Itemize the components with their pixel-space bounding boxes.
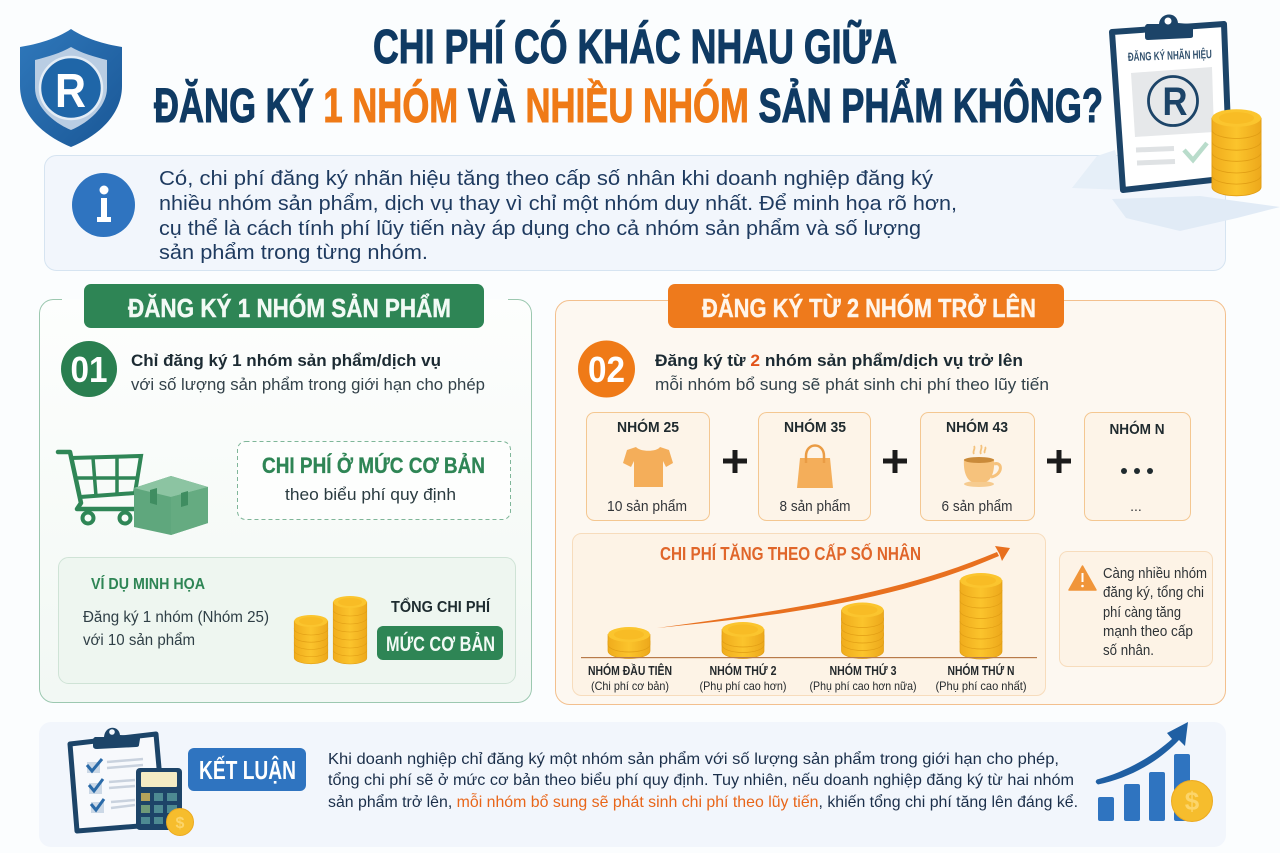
icon: warning triangle bbox=[1069, 566, 1096, 590]
conclusion text bbox=[328, 750, 1078, 811]
chart baseline bbox=[581, 657, 1037, 658]
intro text: Có, chi phí đăng ký nhãn hiệu tăng theo cấp số nhân khi doanh nghiệp đăng ký bbox=[159, 167, 934, 190]
step two description bbox=[655, 351, 1049, 394]
heading: one group: ĐĂNG KÝ 1 NHÓM SẢN PHẨM bbox=[128, 293, 451, 323]
title: ĐĂNG KÝ 1 NHÓM VÀ NHIỀU NHÓM SẢN PHẨM KHÔNG? bbox=[154, 78, 1103, 133]
total cost badge: MỨC CƠ BẢN bbox=[386, 632, 495, 656]
card: group 25 bbox=[586, 412, 710, 520]
icon: checklist clipboard with calculator and coin bbox=[70, 728, 194, 836]
intro text: nhiều nhóm sản phẩm, dịch vụ thay vì chỉ một nhóm duy nhất. Để minh họa rõ hơn, bbox=[159, 192, 957, 215]
coin stack 3 bbox=[842, 602, 884, 658]
conclusion text: sản phẩm trở lên, mỗi nhóm bổ sung sẽ phát sinh chi phí theo lũy tiến, khiến tổng chi phí tăng lên đáng kể. bbox=[328, 792, 1078, 811]
badge 02 bbox=[578, 340, 635, 398]
conclusion text: Khi doanh nghiệp chỉ đăng ký một nhóm sản phẩm với số lượng sản phẩm trong giới hạn cho phép, bbox=[328, 750, 1059, 768]
icon: rising bar chart with coin bbox=[1096, 722, 1212, 822]
chart labels: NHÓM ĐẦU TIÊN bbox=[588, 663, 672, 678]
card: group 35 bbox=[758, 412, 870, 520]
step two description: mỗi nhóm bổ sung sẽ phát sinh chi phí theo lũy tiến bbox=[655, 375, 1049, 394]
card: group 43: NHÓM 43 bbox=[946, 418, 1008, 436]
card: group 25: NHÓM 25 bbox=[617, 418, 679, 436]
card: group N bbox=[1084, 412, 1190, 520]
plus bbox=[1047, 450, 1071, 473]
card: group N: ... bbox=[1130, 498, 1142, 514]
icon: rising bar chart with coin: $ bbox=[1185, 786, 1200, 816]
icon: shopping cart and box bbox=[58, 452, 208, 535]
panel: register multiple groups bbox=[556, 284, 1226, 704]
heading: multiple groups: ĐĂNG KÝ TỪ 2 NHÓM TRỞ LÊN bbox=[702, 292, 1036, 323]
badge 02: 02 bbox=[588, 349, 625, 390]
panel: example: Đăng ký 1 nhóm (Nhóm 25) bbox=[83, 609, 269, 626]
chart labels bbox=[588, 663, 1026, 693]
chart labels: NHÓM THỨ N bbox=[948, 663, 1014, 678]
step one description bbox=[131, 351, 485, 394]
ellipsis bbox=[1121, 468, 1153, 474]
step two description: Đăng ký từ 2 nhóm sản phẩm/dịch vụ trở lên bbox=[655, 351, 1023, 370]
callout: warning note: số nhân. bbox=[1103, 642, 1154, 659]
callout: warning note: đăng ký, tổng chi bbox=[1103, 584, 1204, 601]
card: group 43 bbox=[920, 412, 1034, 520]
icon: clipboard with trademark document and coins bbox=[1072, 14, 1280, 231]
callout: warning note: Càng nhiều nhóm bbox=[1103, 565, 1207, 582]
card: group 35: NHÓM 35 bbox=[784, 418, 846, 436]
callout: base cost: theo biểu phí quy định bbox=[285, 486, 456, 504]
chart labels: NHÓM THỨ 2 bbox=[710, 663, 776, 678]
icon: shopping bag bbox=[797, 446, 833, 488]
badge: conclusion: KẾT LUẬN bbox=[199, 755, 296, 785]
card: group 35: 8 sản phẩm bbox=[780, 498, 850, 515]
title bbox=[154, 19, 1103, 133]
chart labels: (Phụ phí cao hơn nữa) bbox=[810, 679, 916, 693]
panel: example: với 10 sản phẩm bbox=[83, 632, 195, 649]
icon: coin stacks bbox=[294, 596, 367, 664]
icon: t-shirt bbox=[623, 447, 673, 487]
intro text bbox=[159, 167, 957, 264]
callout: warning note: mạnh theo cấp bbox=[1103, 623, 1193, 640]
conclusion text: tổng chi phí sẽ ở mức cơ bản theo biểu phí quy định. Tuy nhiên, nếu doanh nghiệp đăng ký từ hai nhóm bbox=[328, 771, 1074, 789]
card: group N: NHÓM N bbox=[1110, 420, 1164, 438]
icon: coffee cup bbox=[964, 445, 1000, 487]
panel: example: VÍ DỤ MINH HỌA bbox=[91, 574, 205, 593]
coin stack 2 bbox=[722, 622, 764, 658]
step one description: với số lượng sản phẩm trong giới hạn cho phép bbox=[131, 375, 485, 394]
intro text: sản phẩm trong từng nhóm. bbox=[159, 241, 428, 264]
card: group 43: 6 sản phẩm bbox=[942, 498, 1012, 515]
plus bbox=[883, 450, 907, 473]
icon: shield with registered mark: R bbox=[55, 65, 86, 118]
icon: clipboard with trademark document and coins: R bbox=[1162, 80, 1188, 124]
step one description: Chỉ đăng ký 1 nhóm sản phẩm/dịch vụ bbox=[131, 351, 441, 370]
plus bbox=[723, 450, 747, 473]
chart: cost growth bbox=[572, 534, 1046, 696]
badge: conclusion bbox=[188, 748, 306, 791]
chart labels: (Chi phí cơ bản) bbox=[591, 679, 669, 693]
panel: example bbox=[58, 558, 516, 684]
panel: register one group bbox=[40, 284, 532, 702]
coin stack 1 bbox=[608, 627, 650, 658]
callout: base cost bbox=[238, 442, 510, 520]
total cost badge: TỔNG CHI PHÍ bbox=[391, 597, 490, 616]
badge 01: 01 bbox=[70, 349, 108, 390]
heading: one group bbox=[84, 284, 484, 328]
panel: conclusion bbox=[39, 722, 1226, 847]
chart labels: (Phụ phí cao nhất) bbox=[936, 679, 1026, 693]
icon: clipboard with trademark document and coins: ĐĂNG KÝ NHÃN HIỆU bbox=[1128, 46, 1212, 64]
chart labels: (Phụ phí cao hơn) bbox=[700, 679, 787, 693]
chart: cost growth: CHI PHÍ TĂNG THEO CẤP SỐ NHÂN bbox=[660, 543, 921, 564]
callout: warning note bbox=[1060, 552, 1212, 666]
callout: warning note: phí càng tăng bbox=[1103, 604, 1181, 621]
icon: info bbox=[72, 173, 135, 237]
badge 01 bbox=[61, 341, 117, 397]
panel: intro answer bbox=[44, 156, 1226, 270]
icon: shield with registered mark bbox=[20, 29, 122, 147]
callout: base cost: CHI PHÍ Ở MỨC CƠ BẢN bbox=[262, 453, 485, 478]
card: group 25: 10 sản phẩm bbox=[607, 498, 687, 515]
title: CHI PHÍ CÓ KHÁC NHAU GIỮA bbox=[373, 19, 897, 74]
chart labels: NHÓM THỨ 3 bbox=[830, 663, 896, 678]
intro text: cụ thể là cách tính phí lũy tiến này áp dụng cho cả nhóm sản phẩm và số lượng bbox=[159, 217, 921, 240]
heading: multiple groups bbox=[668, 284, 1064, 328]
coin stack 4 bbox=[960, 573, 1002, 659]
total cost badge bbox=[377, 597, 503, 660]
icon: checklist clipboard with calculator and coin: $ bbox=[176, 815, 185, 832]
arrow: growth curve bbox=[657, 546, 1010, 628]
